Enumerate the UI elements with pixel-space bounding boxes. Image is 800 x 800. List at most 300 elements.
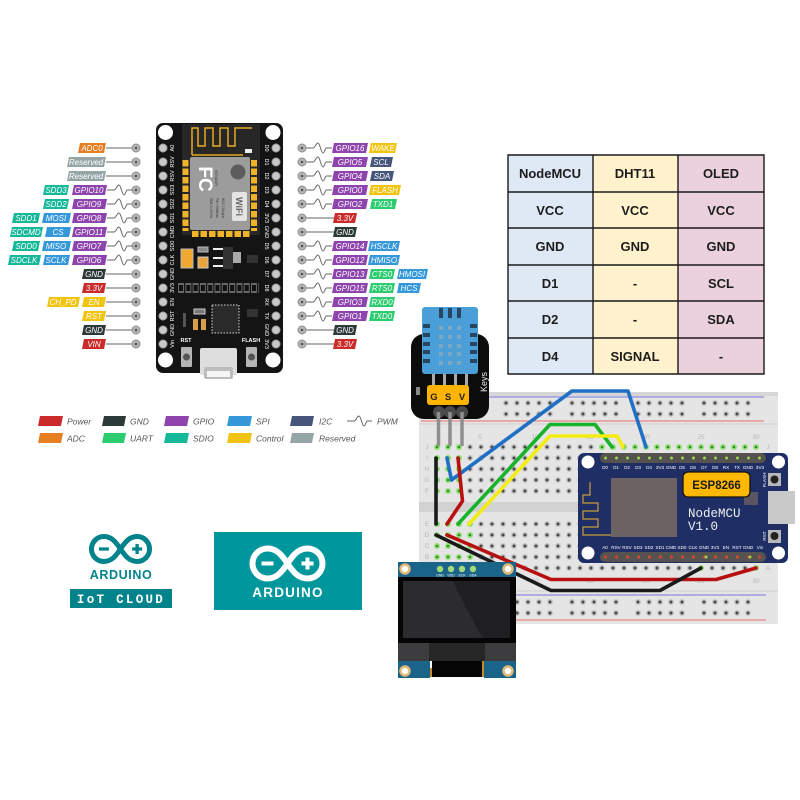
wire: yellow [469, 436, 623, 524]
column numbers: 25 [697, 434, 705, 441]
row letters [424, 444, 771, 572]
pin row: GPIO10 [43, 185, 140, 195]
NodeMCU pinout board [156, 123, 283, 379]
antenna trace [583, 482, 611, 535]
pin row: GPIO3: RXD0 [371, 298, 393, 307]
wire: red short [447, 458, 462, 524]
connection table [508, 155, 764, 374]
wire: red long [447, 535, 756, 580]
pin row: ADC0: ADC0 [80, 144, 103, 153]
row letters: A [425, 565, 430, 572]
pin row: GPIO8: SDD1 [15, 214, 37, 223]
pin row: RST [82, 311, 140, 321]
corner holes [400, 564, 512, 676]
pin labels [436, 574, 477, 578]
pin row: GPIO14 [298, 241, 400, 251]
lower glass band [398, 643, 516, 661]
bottom pin labels: EN [723, 545, 729, 550]
silkscreen right pin names: D4 [263, 200, 269, 208]
NodeMCU V1.0 text: NodeMCU [688, 507, 741, 521]
castellated pads [186, 160, 254, 234]
screen panel [403, 581, 510, 638]
pin row: GPIO0: GPIO0 [338, 186, 363, 195]
bottom pin labels: CMD [666, 545, 677, 550]
silkscreen left pin names: A0 [170, 145, 176, 151]
small chip [744, 492, 758, 505]
pin row: GPIO7: SDD0 [15, 242, 37, 251]
pin row: Reserved: Reserved [69, 158, 104, 167]
pin labels: VDD [447, 574, 455, 578]
top pin labels: 3V3 [656, 465, 665, 470]
row D2 [542, 312, 735, 327]
silkscreen right pin names: D5 [263, 242, 269, 250]
ESP module shield: ISM 2.4GHz [209, 198, 213, 218]
wordmark: ARDUINO [90, 568, 152, 582]
NodeMCU V1.0 text: V1.0 [688, 520, 718, 534]
bottom pin labels: SD0 [678, 545, 687, 550]
top pin labels: D5 [679, 465, 685, 470]
row VCC: VCC [621, 203, 649, 218]
connected green holes [437, 447, 757, 568]
logo: Arduino teal [214, 532, 362, 610]
wire: black short [434, 458, 438, 524]
top pin labels: D8 [712, 465, 718, 470]
bottom pin labels: Vin [757, 545, 764, 550]
pin row: GPIO9 [43, 199, 140, 209]
column numbers: 15 [586, 434, 594, 441]
ESP module shield: WiFi [234, 197, 244, 216]
row letters: I [426, 455, 428, 462]
pin row: GPIO4: SDA [374, 172, 390, 181]
pin row: GPIO11: CS [52, 228, 64, 237]
pin row: GPIO10: SDD3 [45, 186, 67, 195]
FLASH button [762, 473, 781, 487]
pin row: GPIO6: GPIO6 [77, 256, 102, 265]
row letters: E [425, 521, 430, 528]
legend: I2C [290, 416, 333, 426]
pin row: GPIO4 [298, 171, 394, 181]
pin row: GPIO11: SDCMD [11, 228, 41, 237]
wire: green [458, 424, 612, 524]
silkscreen right pin names: GND [263, 324, 269, 336]
RST button: RST [180, 338, 192, 344]
column numbers: 10 [531, 434, 539, 441]
PCB [578, 453, 788, 563]
row GND: GND [707, 239, 735, 254]
silkscreen left pin names: SD2 [170, 199, 176, 209]
pin row: GPIO2: GPIO2 [338, 200, 363, 209]
ESP module [611, 478, 677, 537]
legend: GND [102, 416, 149, 426]
pin row: GPIO1: TXD0 [372, 312, 393, 321]
pin row: 3.3V: 3.3V [86, 284, 103, 293]
logo: Arduino IoT Cloud [70, 537, 172, 608]
legend: PWM [347, 416, 399, 426]
pin row: EN: CH_PD [49, 298, 77, 307]
pin row: GND 2 [298, 325, 357, 335]
legend: I2C: I2C [319, 416, 333, 426]
top pin labels: D1 [613, 465, 619, 470]
silkscreen right pin names: D1 [263, 158, 269, 166]
legend: GPIO [164, 416, 215, 426]
legend: SPI: SPI [256, 416, 270, 426]
DHT11 sensor module [411, 307, 489, 446]
micro USB port [200, 348, 237, 379]
infinity icon [91, 537, 150, 561]
row letters: J [766, 444, 770, 451]
antenna and module backing [182, 124, 260, 235]
pin row: Reserved [67, 157, 140, 167]
silkscreen right pin names: D2 [263, 172, 269, 180]
silkscreen left pin names: Vin [170, 340, 176, 348]
silkscreen left pin names: SD1 [170, 213, 176, 223]
panel: right pin labels [298, 143, 428, 349]
column numbers: 30 [752, 434, 760, 441]
silkscreen right pin names: D7 [263, 270, 269, 278]
mounting holes [158, 125, 280, 368]
pin row: GPIO15 [298, 283, 421, 293]
top pin labels: GND [666, 465, 677, 470]
pin row: Reserved 2: Reserved [69, 172, 104, 181]
ESP module shield: PA +25dBm [215, 198, 219, 218]
USB connector [768, 491, 795, 524]
top pin labels: D7 [701, 465, 707, 470]
silkscreen left pin names: RSV [170, 156, 176, 168]
pin row: GPIO11 [10, 227, 140, 237]
pin row: GPIO15: GPIO15 [336, 284, 365, 293]
bottom pin labels: RSV [622, 545, 633, 550]
legend: Reserved: Reserved [319, 434, 356, 444]
pin sockets [433, 406, 468, 418]
pin row: GND [298, 227, 357, 237]
bottom pin strip [600, 552, 766, 562]
legend: GND: GND [130, 416, 149, 426]
pin row: GPIO8 [12, 213, 140, 223]
ribbon cable [430, 661, 484, 678]
pin row: GPIO13: HMOSI [399, 270, 426, 279]
pin row: GPIO16: GPIO16 [336, 144, 365, 153]
column numbers: 20 [642, 434, 650, 441]
pin row: GPIO11: GPIO11 [75, 228, 103, 237]
table grid [508, 155, 764, 374]
pin row: GPIO1: GPIO1 [338, 312, 362, 321]
legend: Reserved [290, 433, 356, 444]
row D2: - [633, 312, 637, 327]
G S V header: G [430, 392, 438, 403]
NodeMCU module on breadboard [578, 453, 795, 563]
bottom pin labels: SD3 [634, 545, 643, 550]
bottom pin labels [602, 545, 764, 550]
silkscreen right pin names: 3V3 [263, 339, 269, 349]
row letters: F [425, 488, 429, 495]
legend: UART: UART [130, 434, 154, 444]
pin row: VIN [82, 339, 140, 349]
pin row: GPIO3 [298, 297, 395, 307]
power rail lines [421, 397, 766, 595]
pin labels: GND [436, 574, 444, 578]
pin row: GPIO4: GPIO4 [338, 172, 363, 181]
PCB [398, 562, 516, 678]
pin row: GPIO10: GPIO10 [75, 186, 104, 195]
legend: ADC: ADC [66, 434, 86, 444]
silkscreen right pin names: D8 [263, 284, 269, 292]
row D4: SIGNAL [610, 349, 660, 364]
silkscreen left pin names: CMD [170, 226, 176, 238]
row D4: - [719, 349, 723, 364]
teal panel [214, 532, 362, 610]
column numbers: 10 [531, 578, 539, 585]
G S V header [427, 385, 469, 405]
silkscreen left pin names: RSV [170, 170, 176, 182]
top pin labels [602, 465, 765, 470]
legend: Control [227, 433, 285, 444]
pin row: GPIO12: GPIO12 [336, 256, 365, 265]
top pin labels: RX [723, 465, 729, 470]
antenna marker [245, 149, 252, 153]
G S V header: S [445, 392, 451, 403]
silkscreen left pin names: SD3 [170, 185, 176, 195]
pin row: 3.3V 2 [298, 339, 357, 349]
pin row: ADC0 [78, 143, 140, 153]
header row: NodeMCU [519, 166, 581, 181]
pin row: GPIO14: HSCLK [371, 242, 398, 251]
black PCB [411, 334, 489, 419]
row D1 [542, 276, 734, 291]
row D2: D2 [542, 312, 558, 327]
pin row: GPIO9: GPIO9 [77, 200, 102, 209]
legend: PWM: PWM [377, 416, 399, 426]
silkscreen right pin names: RX [263, 298, 269, 306]
SMD components [181, 247, 258, 317]
header row: OLED [703, 166, 739, 181]
pin row: GPIO8: GPIO8 [77, 214, 102, 223]
column numbers [478, 434, 760, 585]
pin row: GPIO6: SDCLK [11, 256, 38, 265]
row letters: A [766, 565, 771, 572]
pin row: GPIO14: GPIO14 [336, 242, 365, 251]
silkscreen left pin names: GND [170, 324, 176, 336]
legend: Power [38, 416, 92, 426]
bottom pin labels: 3V3 [711, 545, 720, 550]
header row: DHT11 [615, 166, 655, 181]
silkscreen right pin names: D0 [263, 144, 269, 152]
row VCC [536, 203, 735, 218]
sensor leads [434, 372, 466, 386]
bottom pin labels: A0 [602, 545, 608, 550]
ESP8266 badge [683, 472, 750, 497]
wire: blue signal [447, 391, 646, 480]
panel: left pin labels [8, 143, 140, 349]
pin row: EN [47, 297, 140, 307]
pin row: GPIO6 [8, 255, 140, 265]
ESP8266 badge: ESP8266 [692, 480, 741, 492]
NodeMCU V1.0 text [688, 507, 741, 534]
silkscreen left pin names: SD0 [170, 241, 176, 251]
ESP module shield: FC [194, 166, 215, 192]
black screen frame [398, 577, 516, 643]
column numbers: 5 [478, 578, 482, 585]
bottom pin labels: SD2 [645, 545, 654, 550]
silkscreen left pin names: RST [170, 310, 176, 322]
pin row: GPIO1 [298, 311, 395, 321]
USB bridge chip [212, 305, 239, 333]
pin row: RST: RST [86, 312, 103, 321]
pin row: GPIO13: GPIO13 [336, 270, 365, 279]
pin row: Reserved 2 [67, 171, 140, 181]
silkscreen left pin names [170, 145, 176, 348]
header pads row [178, 283, 259, 293]
pin row: GPIO16: WAKE [371, 144, 395, 153]
wordmark: ARDUINO [252, 585, 324, 600]
row letters: C [425, 543, 430, 550]
silkscreen left pin names: GND [170, 268, 176, 280]
pin row: GND: GND [85, 270, 103, 279]
pin row: GPIO5: SCL [373, 158, 389, 167]
pin row: GPIO12 [298, 255, 400, 265]
column numbers: 5 [478, 434, 482, 441]
legend: ADC [38, 433, 86, 444]
pin row: GND [82, 269, 140, 279]
pin row: 3.3V 2: 3.3V [337, 340, 354, 349]
pin row: VIN: VIN [87, 340, 101, 349]
silkscreen right pin names: D6 [263, 256, 269, 264]
silkscreen right pin names: GND [263, 226, 269, 238]
pin row: GPIO5 [298, 157, 393, 167]
pin row: GPIO9: SDD2 [45, 200, 67, 209]
wire: black long [436, 535, 701, 590]
mounting holes [582, 456, 785, 560]
pin row: GPIO2 [298, 199, 397, 209]
FLASH button [242, 338, 260, 367]
row GND: GND [621, 239, 649, 254]
small resistors [183, 309, 206, 330]
pin row: GPIO0 [298, 185, 401, 195]
silkscreen left pin names: CLK [170, 254, 176, 265]
row letters: B [425, 554, 429, 561]
pin row: GPIO15: HCS [401, 284, 418, 293]
top pin labels: D3 [635, 465, 641, 470]
bottom pin labels: RSV [611, 545, 622, 550]
legend: SDIO [164, 433, 214, 444]
silkscreen right pin names: 3V3 [263, 213, 269, 223]
pin labels: SCK [458, 574, 466, 578]
Keys text: Keys [479, 371, 489, 392]
row GND: GND [536, 239, 564, 254]
column numbers: 30 [752, 578, 760, 585]
board pin pads right [272, 144, 280, 348]
bottom pin labels: RST [732, 545, 742, 550]
row D1: D1 [542, 276, 558, 291]
pin row: GND 2: GND [336, 326, 354, 335]
pin row: GPIO8: MOSI [46, 214, 67, 223]
pin row: GPIO13 [298, 269, 428, 279]
top pin labels: 3V3 [756, 465, 765, 470]
silkscreen right pin names [263, 144, 269, 349]
row VCC: VCC [536, 203, 564, 218]
legend: Control: Control [256, 434, 285, 444]
pin row: GPIO7: MISO [46, 242, 66, 251]
row letters: H [425, 466, 430, 473]
pin row: 3.3V: 3.3V [337, 214, 354, 223]
header row [519, 166, 739, 181]
bottom pin labels: SD1 [656, 545, 665, 550]
ESP module shield: 802.11b/g/n [221, 198, 225, 218]
pin row: 3.3V [298, 213, 357, 223]
legend: SPI [227, 416, 270, 426]
rail holes [506, 403, 749, 613]
FLASH button: FLASH [242, 338, 260, 344]
row D2: SDA [707, 312, 735, 327]
breadboard [419, 392, 778, 624]
ESP module shield: VENDOR [214, 170, 218, 186]
IoT Cloud badge: IoT CLOUD [77, 593, 165, 607]
OLED display module [398, 562, 516, 678]
bottom pin labels: CLK [689, 545, 698, 550]
pin row: GND: GND [336, 228, 354, 237]
pin row: GPIO6: SCLK [46, 256, 67, 265]
legend: GPIO: GPIO [193, 416, 215, 426]
breadboard body [419, 392, 778, 624]
top pin labels: D2 [624, 465, 630, 470]
RST button: RST [762, 531, 767, 541]
silkscreen right pin names: TX [263, 312, 269, 320]
pin row: 3.3V [82, 283, 140, 293]
row D1: - [633, 276, 637, 291]
pin row: GPIO5: GPIO5 [338, 158, 363, 167]
top pin labels: D4 [646, 465, 652, 470]
legend [38, 416, 399, 444]
legend: SDIO: SDIO [193, 434, 214, 444]
column numbers: 20 [642, 578, 650, 585]
RST button [762, 530, 781, 543]
pin row: GND 2 [82, 325, 140, 335]
silkscreen right pin names: D3 [263, 186, 269, 194]
pin row: GPIO16 [298, 143, 397, 153]
board body [156, 123, 283, 373]
pin row: GPIO7: GPIO7 [77, 242, 102, 251]
table cell backgrounds [508, 155, 764, 374]
terminal holes [437, 447, 757, 568]
bottom pin labels: GND [699, 545, 710, 550]
row D1: SCL [708, 276, 734, 291]
column numbers: 15 [586, 578, 594, 585]
pin row: GND 2: GND [85, 326, 103, 335]
top pin labels: D0 [602, 465, 608, 470]
FLASH button: FLASH [762, 473, 767, 487]
top pin labels: TX [734, 465, 740, 470]
row letters: J [425, 444, 429, 451]
top pin strip [600, 453, 766, 463]
top pin labels: D6 [690, 465, 696, 470]
row D4: D4 [542, 349, 559, 364]
pin row: GPIO15: RTS0 [372, 284, 393, 293]
row letters: D [425, 532, 430, 539]
column numbers: 25 [697, 578, 705, 585]
board pin pads left [159, 144, 167, 348]
pin row: GPIO12: HMISO [371, 256, 397, 265]
bottom pin labels: GND [743, 545, 754, 550]
pin row: GPIO2: TXD1 [373, 200, 393, 209]
row letters: G [424, 477, 430, 484]
pin row: GPIO3: GPIO3 [338, 298, 363, 307]
blue sensor housing [422, 307, 478, 374]
top pin labels: GND [743, 465, 754, 470]
small resistor [416, 387, 420, 395]
legend: Power: Power [67, 416, 92, 426]
silkscreen left pin names: 3V3 [170, 283, 176, 293]
pin labels: SDA [469, 574, 477, 578]
row GND [536, 239, 735, 254]
